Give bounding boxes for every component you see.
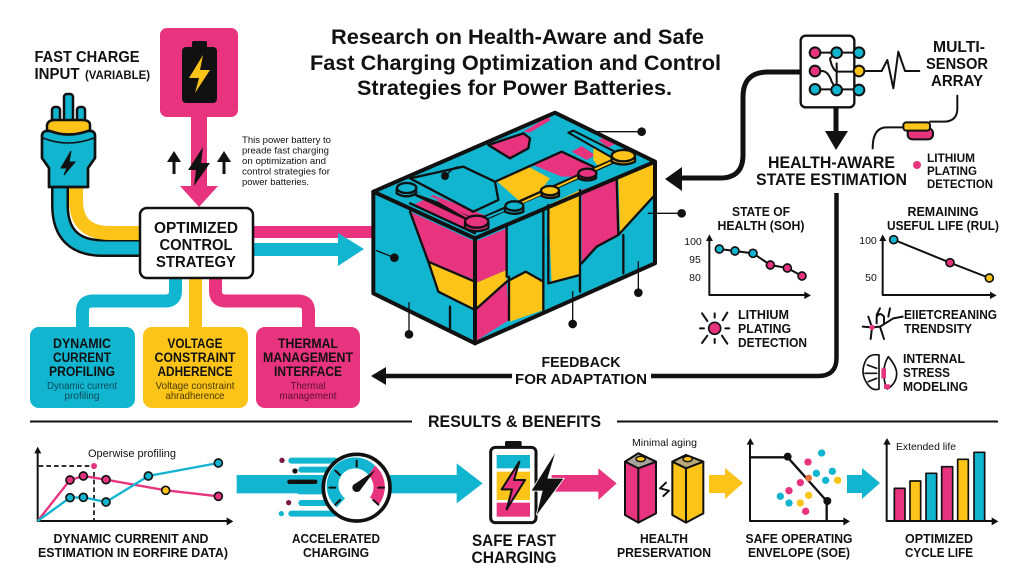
- arrow: blue: [847, 468, 880, 499]
- battery callouts: [377, 127, 686, 339]
- chart: remaining useful life: [859, 204, 999, 299]
- heading: health-aware state estimation: [756, 153, 907, 189]
- label: safe fast charging: CHARGING: [472, 548, 556, 567]
- panel: voltage constraint adherence: CONSTRAINT: [154, 350, 236, 365]
- heading: fast charge input: (VARIABLE): [85, 68, 150, 82]
- icon: health preservation cells: Minimal aging: [632, 437, 697, 449]
- box: optimized control strategy: OPTIMIZED: [154, 220, 238, 237]
- panel: thermal management interface: [256, 327, 360, 408]
- heading: results and benefits: RESULTS & BENEFITS: [428, 412, 601, 431]
- icon: sensor circuit chip: [801, 36, 919, 107]
- text: internal stress modeling: MODELING: [903, 379, 968, 394]
- chart: remaining useful life: 50: [865, 272, 877, 284]
- label: safe fast charging: [472, 531, 557, 567]
- label: accelerated charging: CHARGING: [303, 545, 369, 560]
- chart: state of health: STATE OF: [732, 204, 790, 219]
- text block: description: preade fast charging: [242, 146, 329, 156]
- panel: voltage constraint adherence: Voltage constraint: [156, 380, 235, 392]
- heading: fast charge input: INPUT: [34, 66, 80, 83]
- title: [310, 26, 721, 100]
- panel: voltage constraint adherence: ADHERENCE: [158, 364, 232, 379]
- panel: battery input box with arrow: [160, 28, 238, 207]
- text: internal stress modeling: STRESS: [903, 365, 950, 380]
- panel: dynamic current profiling: DYNAMIC: [53, 336, 111, 351]
- panel: dynamic current profiling: Dynamic current: [47, 380, 117, 392]
- box: optimized control strategy: STRATEGY: [156, 254, 236, 271]
- chart: optimized cycle life bars: Extended life: [896, 441, 956, 453]
- battery outline: [373, 113, 655, 343]
- panel: dynamic current profiling: profiling: [64, 390, 100, 402]
- panel: voltage constraint adherence: ahradherence: [166, 390, 225, 402]
- label: optimized cycle life: CYCLE LIFE: [905, 545, 973, 560]
- title: Research on Health-Aware and Safe: [331, 26, 704, 49]
- label: multi-sensor array: [926, 39, 988, 90]
- arrow: sensor to estimation: [825, 107, 848, 150]
- panel: voltage constraint adherence: VOLTAGE: [168, 336, 222, 351]
- heading: health-aware state estimation: HEALTH-AWARE: [768, 153, 895, 172]
- label: safe fast charging: SAFE FAST: [472, 531, 557, 550]
- text block: description: control strategies for: [242, 166, 330, 178]
- panel: voltage constraint adherence: [143, 327, 248, 408]
- label: multi-sensor array: MULTI-: [933, 39, 985, 56]
- heading: health-aware state estimation: STATE ESTIMATION: [756, 170, 907, 189]
- panel: dynamic current profiling: CURRENT: [53, 350, 112, 365]
- heading: fast charge input: [34, 49, 150, 83]
- label: feedback for adaptation: FEEDBACK: [542, 354, 621, 371]
- chart: dynamic current estimation: DYNAMIC CURRENIT AND: [54, 531, 208, 546]
- text: lithium plating detection lower: PLATING: [738, 321, 791, 336]
- text block: description: on optimization and: [242, 156, 326, 167]
- callout: lithium plating detection top: [913, 151, 993, 191]
- connectors: strategy to modules: [82, 276, 308, 330]
- label: accelerated charging: [292, 531, 380, 560]
- box: optimized control strategy: [140, 208, 253, 278]
- text: trend density: TRENDSITY: [904, 321, 972, 336]
- icon: upward arrows and bolt: [167, 147, 231, 186]
- text block: description: This power battery to: [242, 135, 331, 146]
- panel: dynamic current profiling: [30, 327, 135, 408]
- arrow: feedback for adaptation: [371, 193, 836, 385]
- icon: brain stress model: [863, 355, 897, 390]
- chart: dynamic current estimation: ESTIMATION IN EORFIRE DATA): [38, 545, 228, 560]
- label: safe operating envelope: ENVELOPE (SOE): [748, 545, 850, 560]
- panel: thermal management interface: INTERFACE: [274, 364, 342, 379]
- battery terminals: [397, 131, 635, 231]
- chart: state of health: 80: [689, 272, 701, 284]
- label: accelerated charging: ACCELERATED: [292, 531, 380, 546]
- label: health preservation: [617, 531, 711, 560]
- label: multi-sensor array: SENSOR: [926, 56, 988, 73]
- text block: description: power batteries.: [242, 177, 309, 188]
- text: trend density: [904, 307, 997, 336]
- label: health preservation: HEALTH: [640, 531, 688, 546]
- arrow: sensor data to battery: [665, 72, 802, 191]
- chart: optimized cycle life bars: [883, 438, 998, 525]
- icon: safe fast charging battery: [491, 441, 617, 523]
- arrow: yellow: [709, 468, 743, 499]
- heading: fast charge input: FAST CHARGE: [34, 49, 140, 66]
- chart: safe operating envelope: [747, 438, 850, 525]
- chart: state of health: [684, 204, 811, 299]
- panel: dynamic current profiling: PROFILING: [49, 364, 115, 379]
- chart: dynamic current estimation: Operwise profiling: [88, 448, 176, 460]
- icon: health preservation cells: [625, 437, 703, 523]
- panel: thermal management interface: Thermal: [290, 380, 326, 392]
- text: trend density: EIIETCREANING: [904, 307, 997, 322]
- label: safe operating envelope: SAFE OPERATING: [746, 531, 852, 546]
- callout: lithium plating detection top: PLATING: [927, 164, 977, 178]
- chart: remaining useful life: 100: [859, 235, 877, 247]
- arrows: strategy to battery: [250, 226, 374, 266]
- callout: lithium plating detection top: DETECTION: [927, 177, 993, 191]
- label: optimized cycle life: OPTIMIZED: [905, 531, 973, 546]
- box: optimized control strategy: CONTROL: [160, 237, 233, 254]
- icon: sensor probe: [873, 96, 957, 148]
- icon: accelerated charging speedometer: [237, 454, 483, 521]
- chart: remaining useful life: REMAINING: [908, 204, 978, 219]
- label: feedback for adaptation: [515, 354, 647, 388]
- label: health preservation: PRESERVATION: [617, 545, 711, 560]
- icon: lithium plating burst: [700, 313, 729, 344]
- panel: thermal management interface: management: [280, 390, 337, 402]
- chart: dynamic current estimation: [34, 447, 233, 560]
- icon: charging plug and cable: [42, 94, 142, 248]
- panel: thermal management interface: MANAGEMENT: [263, 350, 354, 365]
- label: multi-sensor array: ARRAY: [931, 73, 983, 90]
- text block: description: [242, 135, 331, 188]
- callout: lithium plating detection top: LITHIUM: [927, 151, 975, 165]
- panel: thermal management interface: THERMAL: [278, 336, 338, 351]
- illustration: battery pack: [373, 113, 686, 343]
- label: feedback for adaptation: FOR ADAPTATION: [515, 371, 647, 388]
- text: lithium plating detection lower: [738, 307, 807, 350]
- title: Fast Charging Optimization and Control: [310, 52, 721, 75]
- text: internal stress modeling: INTERNAL: [903, 351, 965, 366]
- chart: state of health: 95: [689, 254, 701, 266]
- text: internal stress modeling: [903, 351, 968, 394]
- chart: remaining useful life: USEFUL LIFE (RUL): [887, 218, 999, 233]
- text: lithium plating detection lower: LITHIUM: [738, 307, 789, 322]
- title: Strategies for Power Batteries.: [357, 77, 672, 100]
- text: lithium plating detection lower: DETECTION: [738, 335, 807, 350]
- chart: state of health: HEALTH (SOH): [718, 218, 804, 233]
- icon: crack dendrite: [863, 308, 903, 339]
- chart: state of health: 100: [684, 236, 702, 248]
- label: optimized cycle life: [905, 531, 973, 560]
- label: safe operating envelope: [746, 531, 852, 560]
